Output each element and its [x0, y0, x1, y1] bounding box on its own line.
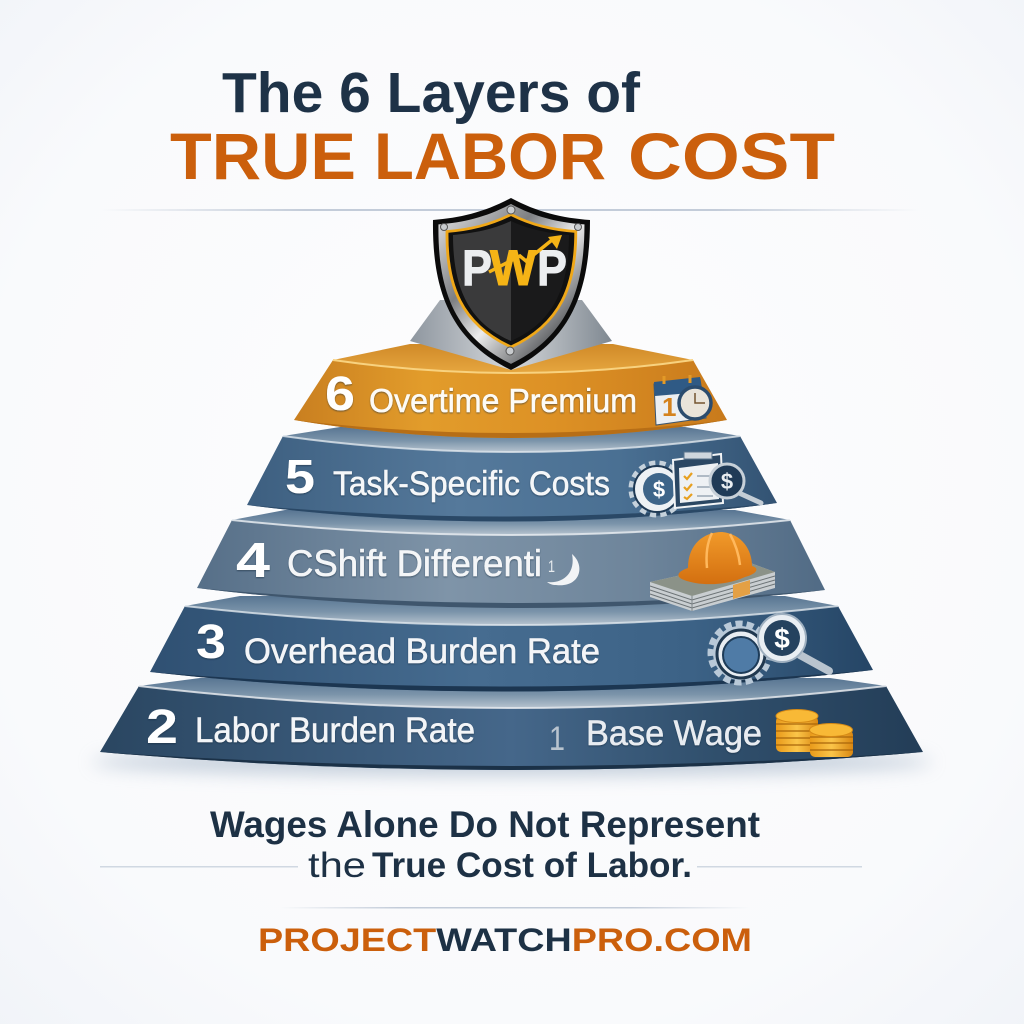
- shield logo: PWP: [410, 198, 612, 370]
- tier 4: shift differential: 4: [236, 534, 270, 588]
- icon: calendar and clock: 1: [662, 392, 676, 422]
- icon: gear, clipboard and magnifier: $: [653, 477, 665, 502]
- tier 3: overhead burden rate: 3: [196, 616, 226, 669]
- tier 6: overtime premium: 6: [325, 368, 355, 421]
- icon: gear, clipboard and magnifier: [632, 452, 761, 514]
- shield logo: PWP: P: [462, 240, 492, 296]
- tier shadow: [92, 748, 932, 776]
- title: LABOR: [374, 119, 606, 193]
- shield logo: PWP: W: [490, 240, 537, 296]
- tier 5: task-specific costs: 5: [285, 451, 315, 504]
- closing statement: the: [308, 846, 366, 885]
- closing statement: Wages Alone Do Not Represent: [210, 804, 760, 845]
- tier 4: shift differential: CShift Differenti: [287, 543, 542, 584]
- website url: PROJECT WATCH PRO.COM: [258, 922, 752, 958]
- tier 2: labor burden rate and base wage: Labor Burden Rate: [195, 711, 475, 750]
- icon: gear, clipboard and magnifier: $: [721, 469, 733, 494]
- icon: gold coins: [776, 710, 853, 757]
- tier 5: task-specific costs: Task-Specific Costs: [333, 465, 610, 503]
- tier 6: overtime premium: Overtime Premium: [369, 382, 637, 419]
- icon: calendar and clock: [654, 375, 711, 425]
- tier 5: task-specific costs: [247, 427, 777, 522]
- tier 4: shift differential: [197, 510, 825, 608]
- support wedge: [410, 300, 612, 370]
- tier 2: labor burden rate and base wage: 1: [549, 720, 565, 758]
- closing statement: True Cost of Labor.: [372, 846, 692, 885]
- tier 2: labor burden rate and base wage: 2: [146, 701, 178, 754]
- title: [170, 61, 835, 193]
- title: The 6 Layers of: [222, 61, 641, 125]
- tier 2: labor burden rate and base wage: [100, 678, 923, 770]
- closing statement: [210, 804, 760, 885]
- tier 3: overhead burden rate: [150, 596, 873, 692]
- title: TRUE: [170, 119, 356, 193]
- tier 6: overtime premium: [294, 344, 727, 438]
- tier 4: shift differential: 1: [548, 557, 555, 576]
- title: COST: [628, 119, 835, 193]
- shield logo: PWP: P: [537, 240, 567, 296]
- tier 2: labor burden rate and base wage: Base Wage: [586, 714, 762, 753]
- icon: gear and magnifier: [711, 614, 829, 682]
- icon: gear and magnifier: $: [774, 623, 790, 654]
- tier 3: overhead burden rate: Overhead Burden Rate: [244, 632, 600, 671]
- icon: hard hat on cash stack: [650, 532, 775, 611]
- icon: crescent moon: [547, 554, 579, 585]
